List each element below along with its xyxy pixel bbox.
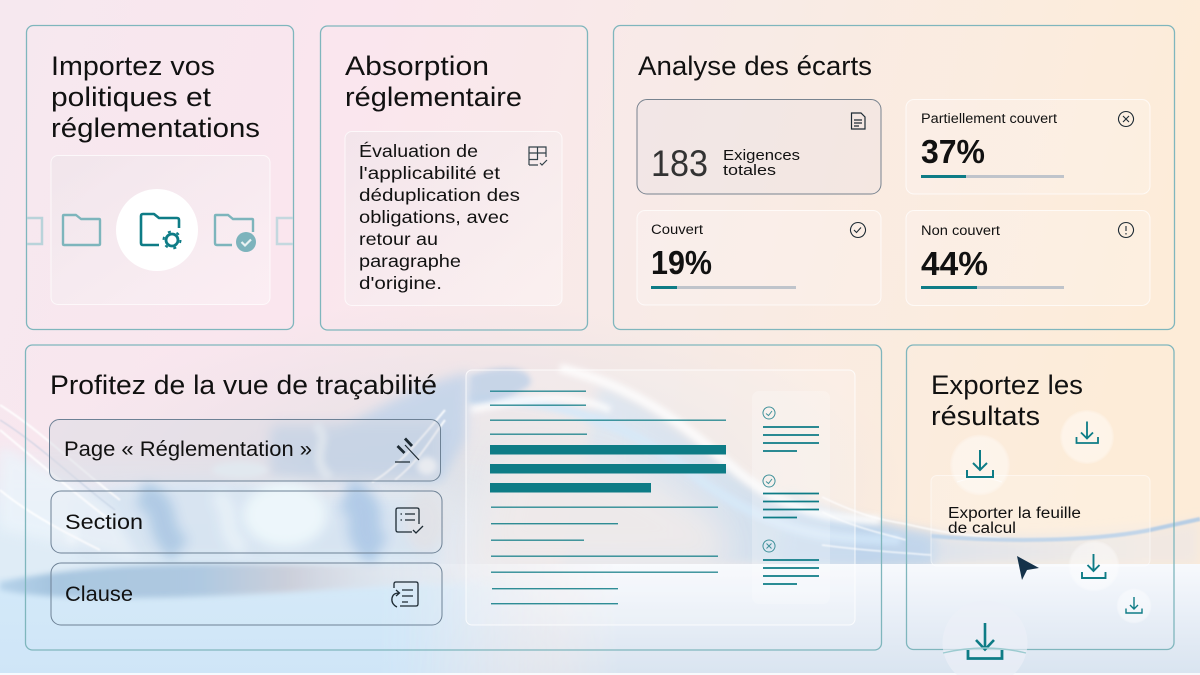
- icon: clause list: [392, 582, 418, 607]
- right streaks: [822, 497, 1000, 538]
- stat card: partially covered: Partiellement couvert: [921, 111, 1057, 126]
- icon: check 1: [763, 407, 775, 419]
- icon: cursor arrow: [1017, 556, 1039, 580]
- lower floor: [0, 586, 482, 673]
- row: clause: [51, 563, 442, 625]
- icon: checklist: [396, 508, 423, 533]
- row: page reglementation: [50, 420, 440, 481]
- icon: cross: [763, 540, 775, 552]
- description card: paragraphe: [359, 251, 461, 271]
- export card: de calcul: [948, 520, 1016, 537]
- heading: absorption: réglementaire: [345, 82, 522, 112]
- side lines 1: [763, 427, 819, 451]
- side lines 3: [763, 560, 819, 584]
- icon: download bubble 4: [1116, 588, 1152, 624]
- heading: absorption: [345, 51, 522, 112]
- panel: traceability: [26, 345, 882, 650]
- stat card: covered: Couvert: [651, 222, 703, 237]
- row: page reglementation: Page « Réglementation »: [64, 437, 312, 461]
- heading: analyse: Analyse des écarts: [638, 51, 872, 81]
- icon: partial folder left: [27, 218, 42, 244]
- export card: [931, 476, 1150, 566]
- side lines 2: [763, 494, 819, 518]
- stat card: not covered: Non couvert: [921, 223, 1000, 238]
- description card: d'origine.: [359, 273, 442, 293]
- description card: déduplication des: [359, 185, 520, 205]
- stat card: partially covered: [906, 100, 1150, 194]
- icon: download bubble 2: [1060, 410, 1114, 464]
- description card: [345, 132, 562, 306]
- icon: large download bubble: [943, 601, 1028, 675]
- panel: export: [906, 345, 1174, 675]
- heading: export: Exportez les: [931, 370, 1083, 400]
- heading: importez: politiques et: [51, 82, 212, 112]
- icon: download bubble 1: [950, 434, 1010, 496]
- panel: importez vos politiques: [26, 26, 294, 330]
- heading: importez: [51, 51, 260, 143]
- icon: check 2: [763, 475, 775, 487]
- document lines: [490, 390, 726, 604]
- description card: retour au: [359, 229, 438, 249]
- icon: check circle: [851, 222, 866, 238]
- icon: folder: [63, 215, 100, 245]
- row: clause: Clause: [65, 582, 133, 606]
- folder carousel card: [27, 156, 293, 304]
- stat card: total requirements: Exigences: [723, 147, 800, 164]
- icon: exclamation circle: [1119, 222, 1134, 238]
- stat card: not covered: 44%: [921, 245, 988, 282]
- side checks column: [752, 391, 830, 604]
- description card: obligations, avec: [359, 207, 509, 227]
- heading: export: [931, 370, 1083, 431]
- left swirl: [290, 372, 470, 482]
- icon: document: [852, 113, 865, 129]
- document preview panel: [466, 370, 855, 625]
- stat card: total requirements: [637, 100, 881, 194]
- stat card: covered: [637, 210, 881, 305]
- description card: Évaluation de: [359, 141, 478, 161]
- icon: gavel: [395, 445, 419, 462]
- panel: analyse des écarts: [614, 26, 1174, 330]
- stat card: not covered: [906, 210, 1150, 306]
- icon: table check: [529, 147, 547, 165]
- heading: absorption: Absorption: [345, 51, 489, 81]
- stat card: total requirements: 183: [651, 143, 708, 184]
- heading: importez: Importez vos: [51, 51, 215, 81]
- panel: absorption: [320, 26, 588, 330]
- stat card: partially covered: 37%: [921, 133, 985, 170]
- row: section: [51, 491, 442, 553]
- row: section: Section: [65, 510, 143, 534]
- stat card: covered: 19%: [651, 244, 712, 281]
- stat card: total requirements: totales: [723, 162, 776, 179]
- heading: traceability: Profitez de la vue de traçabilité: [50, 370, 437, 400]
- icon: partial folder right: [277, 218, 293, 244]
- export card: Exporter la feuille: [948, 505, 1081, 522]
- white circle with settings folder: [116, 189, 198, 271]
- heading: export: résultats: [931, 401, 1040, 431]
- heading: importez: réglementations: [51, 113, 260, 143]
- description card: l'applicabilité et: [359, 163, 500, 183]
- main ribbon body, right: [560, 385, 1200, 566]
- icon: download bubble 3: [1068, 540, 1120, 592]
- icon: cross circle: [1119, 112, 1134, 127]
- icon: folder with check: [215, 215, 256, 252]
